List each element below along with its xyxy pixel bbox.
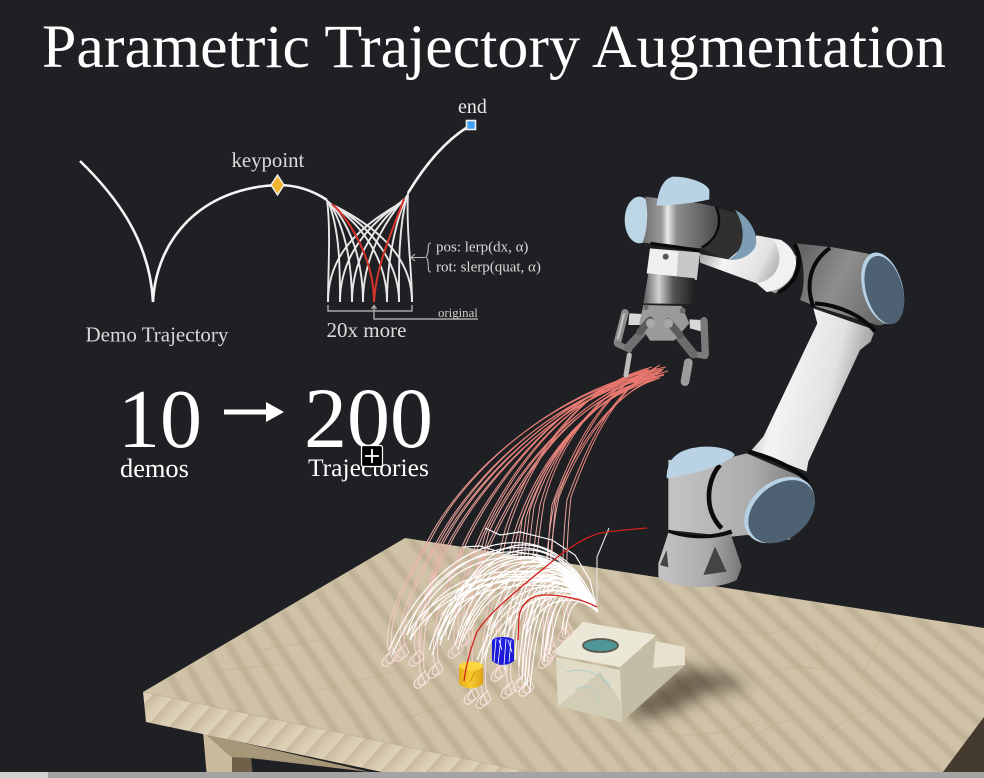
label: trajectories: Trajectories xyxy=(308,453,429,482)
title: Parametric Trajectory Augmentation xyxy=(42,14,946,81)
white outlier trajectory xyxy=(597,528,609,603)
table xyxy=(143,538,984,778)
gripper finger blocks xyxy=(628,313,703,332)
base top cap xyxy=(667,447,735,478)
box cast shadow xyxy=(625,667,750,720)
red original trajectories xyxy=(464,528,647,681)
table stripes xyxy=(170,539,984,778)
wrist body xyxy=(643,197,719,248)
demo trajectory curve xyxy=(80,125,471,302)
end marker xyxy=(466,120,476,130)
label: 20x more: 20x more xyxy=(326,318,406,342)
table right side edge xyxy=(943,717,984,772)
box right face xyxy=(620,637,685,722)
apron xyxy=(205,734,370,772)
augmented trajectory fan xyxy=(327,193,412,302)
box front face xyxy=(556,657,622,722)
wrist rings xyxy=(651,207,719,251)
formula labels xyxy=(436,240,541,276)
forearm collar xyxy=(757,239,796,292)
elbow cap xyxy=(854,248,911,329)
box hole xyxy=(583,639,618,652)
formula labels: pos: lerp(dx, α) xyxy=(436,240,528,256)
bracket and original pointer xyxy=(328,305,478,319)
keypoint marker xyxy=(271,175,284,195)
white trajectories to box xyxy=(389,528,598,690)
dark flange xyxy=(643,273,695,304)
shoulder cap xyxy=(731,463,827,557)
forearm xyxy=(700,235,797,293)
formula labels: rot: slerp(quat, α) xyxy=(436,260,541,276)
elbow rings xyxy=(778,244,875,332)
browser scrollbar xyxy=(0,772,984,778)
table top xyxy=(143,538,984,778)
leg inner shadow xyxy=(232,757,253,778)
cursor icon xyxy=(362,446,382,466)
label: demo trajectory: Demo Trajectory xyxy=(86,322,229,346)
yellow cylinder xyxy=(459,662,483,688)
gripper xyxy=(617,305,705,382)
shoulder xyxy=(668,453,808,540)
gripper palm xyxy=(639,305,689,341)
white neck xyxy=(647,248,700,280)
gripper fingers xyxy=(617,313,705,382)
robot arm xyxy=(617,177,911,587)
big number: 10: 10 xyxy=(118,373,202,466)
lower arm ring xyxy=(748,452,808,482)
wrist blue ring xyxy=(728,210,756,260)
pink trajectories from gripper xyxy=(382,365,668,708)
label: demos: demos xyxy=(120,453,189,483)
shoulder rings xyxy=(668,465,732,537)
neck bolt xyxy=(663,254,669,260)
blue cylinder xyxy=(492,637,514,665)
original trajectory in red xyxy=(332,199,404,302)
wood grain xyxy=(220,625,880,770)
elbow xyxy=(797,243,902,325)
box xyxy=(553,622,685,722)
lower arm xyxy=(752,308,875,472)
box top face xyxy=(553,622,656,667)
arrow xyxy=(224,402,284,422)
robot base xyxy=(658,533,742,587)
trajectory diagram xyxy=(80,96,541,346)
brace and arrow xyxy=(411,243,431,272)
base triangle cutouts xyxy=(660,547,727,575)
label: original: original xyxy=(438,306,478,320)
wrist top cap xyxy=(657,177,709,206)
label: keypoint: keypoint xyxy=(232,149,305,172)
table leg xyxy=(203,732,232,778)
wrist dark cylinder xyxy=(700,207,757,260)
box tab xyxy=(653,641,685,668)
big number: 200: 200 xyxy=(304,370,433,466)
wrist side cap xyxy=(625,197,654,243)
table front edge xyxy=(143,692,558,778)
label: end: end xyxy=(458,96,487,118)
